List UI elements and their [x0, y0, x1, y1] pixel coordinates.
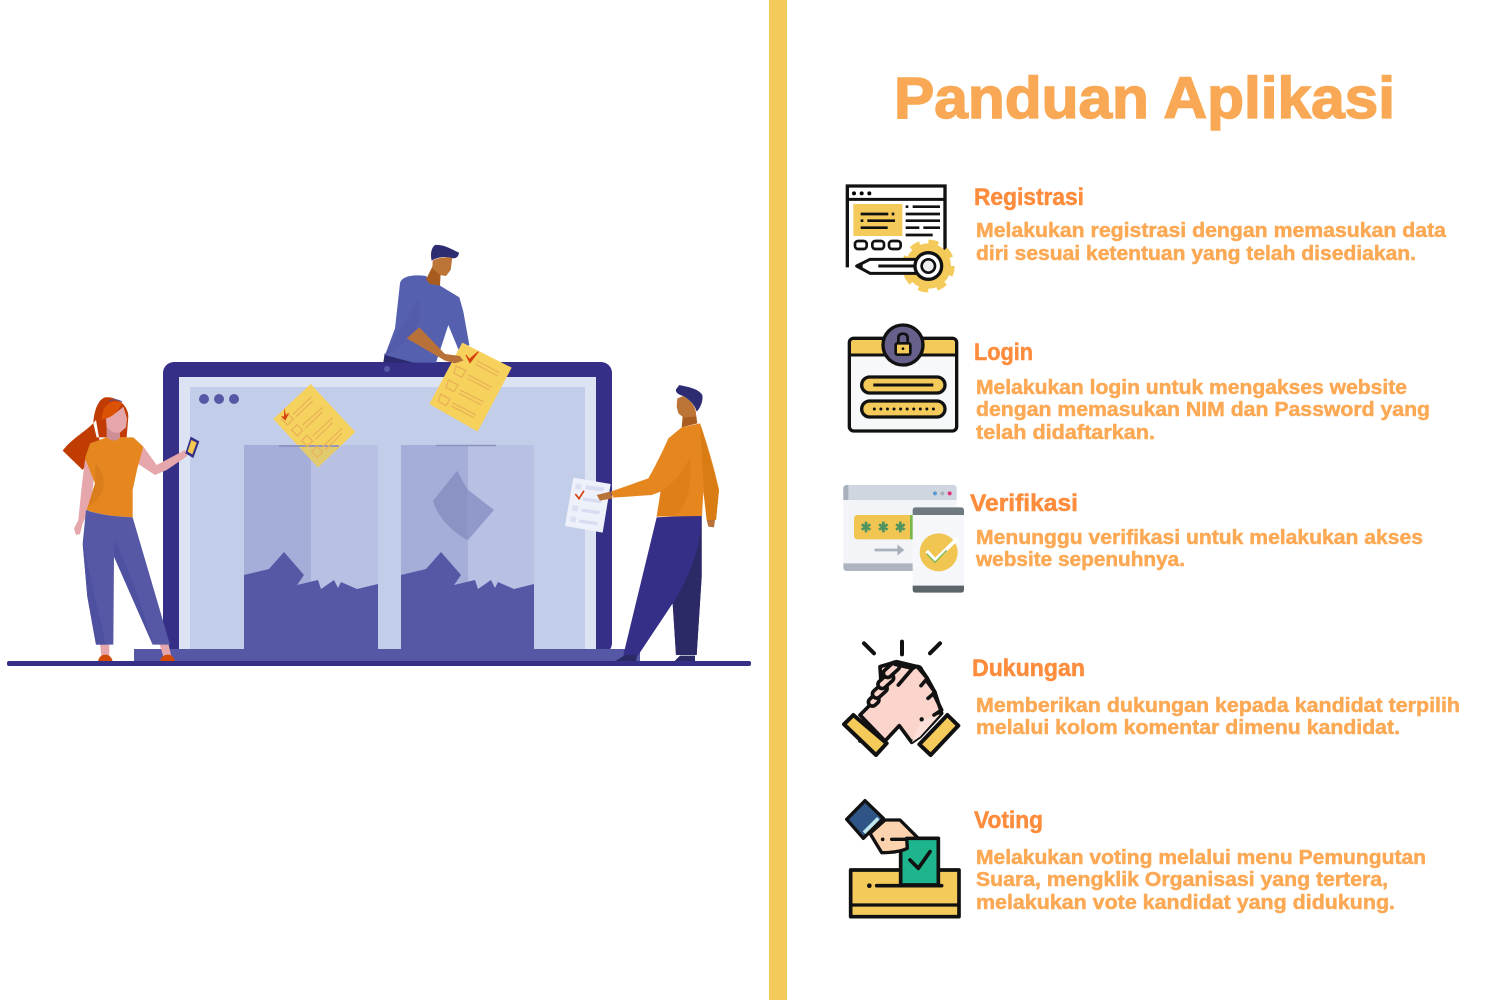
man standing right with white ballot [565, 385, 719, 661]
description [976, 377, 1430, 444]
heading: Login [974, 339, 1033, 366]
description: Suara, mengklik Organisasi yang tertera, [976, 869, 1388, 891]
description: Melakukan voting melalui menu Pemungutan [976, 847, 1426, 869]
description: diri sesuai ketentuan yang telah disediakan. [976, 243, 1416, 265]
icon: browser and phone verification [843, 485, 964, 593]
white ballot [565, 478, 611, 533]
step: Voting [847, 801, 1426, 917]
description: melalui kolom komentar dimenu kandidat. [976, 717, 1400, 739]
heading: Verifikasi [970, 490, 1078, 517]
description [976, 220, 1447, 265]
man on top of the laptop with yellow ballot [383, 245, 512, 432]
illustration: people voting around a laptop [7, 245, 751, 666]
legs [100, 643, 171, 657]
description: telah didaftarkan. [976, 422, 1155, 444]
arm [407, 327, 463, 363]
shoes [98, 655, 175, 661]
hair [63, 397, 128, 470]
ballot box right slot [401, 445, 534, 650]
description: dengan memasukan NIM dan Password yang [976, 399, 1430, 421]
woman holding a phone [63, 397, 199, 661]
heading: Dukungan [972, 655, 1085, 682]
title: Panduan Aplikasi [894, 66, 1395, 131]
heading: Voting [974, 807, 1043, 834]
description [976, 695, 1460, 739]
step: Login [849, 325, 1430, 444]
description: Menunggu verifikasi untuk melakukan akses [976, 527, 1423, 549]
description: Melakukan login untuk mengakses website [976, 377, 1407, 399]
description: melakukan vote kandidat yang didukung. [976, 892, 1395, 914]
pants [623, 515, 702, 655]
icon: hand dropping ballot into box [847, 801, 959, 917]
description: Melakukan registrasi dengan memasukan data [976, 220, 1447, 242]
arms [74, 460, 96, 535]
head and sweater [611, 385, 719, 527]
step: Registrasi [847, 184, 1447, 290]
description: Memberikan dukungan kepada kandidat terpilih [976, 695, 1460, 717]
phone [185, 437, 199, 458]
yellow ballot paper falling into the slot [273, 384, 355, 467]
neck [107, 427, 120, 441]
description [975, 527, 1423, 571]
step: Dukungan [844, 642, 1460, 755]
heading: Registrasi [974, 184, 1084, 211]
icon: registration form with pencil and gear [847, 186, 952, 290]
yellow vertical divider [769, 0, 787, 1000]
description [976, 847, 1426, 914]
icon: clasped hands [844, 642, 958, 755]
ballot box left slot [244, 445, 378, 650]
shirt [85, 437, 143, 517]
description: website sepenuhnya. [975, 549, 1185, 571]
ground line [7, 661, 751, 666]
face [106, 407, 127, 433]
step: Verifikasi [843, 485, 1423, 593]
sweater and head [385, 245, 469, 363]
laptop [134, 362, 640, 662]
icon: login window with padlock [849, 325, 957, 431]
ballot paper [429, 343, 512, 432]
